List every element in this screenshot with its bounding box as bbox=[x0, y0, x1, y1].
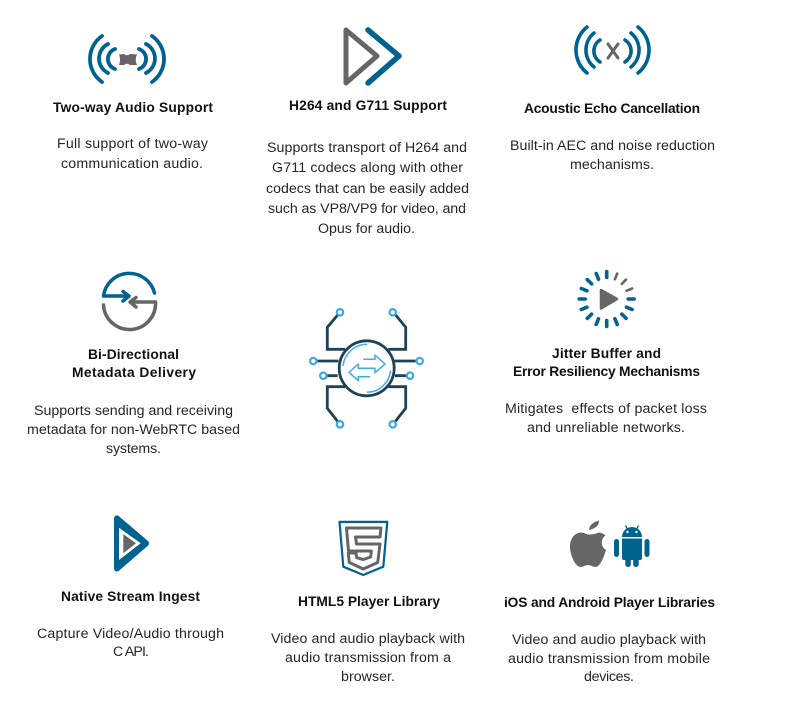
text: jitter buffer: and unreliable networks. bbox=[527, 420, 685, 436]
text: H264 and G711: G711 codecs along with other bbox=[272, 160, 463, 176]
panel: HTML5 player library bbox=[271, 522, 465, 685]
panel: iOS and Android libraries bbox=[504, 520, 715, 685]
heading: iOS and Android libraries: iOS and Android Player Libraries bbox=[504, 595, 715, 610]
text: iOS and Android libraries: audio transmission from mobile bbox=[508, 651, 710, 667]
heading: native stream ingest: Native Stream Ingest bbox=[61, 589, 200, 604]
heading: H264 and G711: H264 and G711 Support bbox=[289, 98, 447, 113]
text: jitter buffer bbox=[505, 401, 707, 436]
text: native stream ingest bbox=[37, 626, 224, 660]
icon: echo waves with x bbox=[576, 27, 649, 73]
icon: two-way audio waves bbox=[90, 36, 164, 82]
icon: double play chevrons bbox=[346, 30, 399, 83]
heading: jitter buffer: Jitter Buffer and bbox=[552, 346, 661, 361]
text: acoustic echo cancellation: Built-in AEC and noise reduction bbox=[510, 138, 715, 154]
text: iOS and Android libraries bbox=[508, 632, 710, 685]
panel: bi-directional metadata bbox=[27, 273, 240, 457]
text: acoustic echo cancellation: mechanisms. bbox=[570, 157, 654, 173]
icon: apple logo bbox=[570, 520, 606, 567]
heading: acoustic echo cancellation: Acoustic Echo Cancellation bbox=[524, 101, 700, 116]
heading: HTML5 player library: HTML5 Player Library bbox=[298, 594, 440, 609]
text: H264 and G711: Opus for audio. bbox=[318, 221, 415, 237]
text: bi-directional metadata: systems. bbox=[106, 441, 161, 457]
text: HTML5 player library bbox=[271, 631, 465, 685]
text: jitter buffer: Mitigates effects of packet loss bbox=[505, 401, 707, 417]
icon: HTML5 shield bbox=[340, 522, 387, 575]
text: acoustic echo cancellation bbox=[510, 138, 715, 173]
icon: bi-directional arrows in circle bbox=[104, 273, 156, 330]
heading: bi-directional metadata bbox=[72, 347, 196, 380]
central hub icon bbox=[310, 309, 423, 427]
text: iOS and Android libraries: devices. bbox=[584, 669, 634, 685]
panel: native stream ingest bbox=[37, 518, 224, 660]
text: H264 and G711: Supports transport of H264 and bbox=[267, 140, 467, 156]
text: bi-directional metadata bbox=[27, 403, 240, 457]
heading: bi-directional metadata: Metadata Delivery bbox=[72, 365, 196, 380]
icon: loading ring with play button bbox=[579, 272, 634, 326]
icon: android robot bbox=[614, 526, 650, 567]
panel: two-way audio bbox=[53, 36, 213, 172]
text: native stream ingest: Capture Video/Audio through bbox=[37, 626, 224, 642]
heading: jitter buffer: Error Resiliency Mechanisms bbox=[513, 364, 700, 379]
text: two-way audio: communication audio. bbox=[61, 156, 203, 172]
text: H264 and G711: codecs that can be easily added bbox=[266, 181, 469, 197]
text: H264 and G711 bbox=[266, 140, 469, 237]
text: two-way audio: Full support of two-way bbox=[57, 136, 209, 152]
text: bi-directional metadata: Supports sending and receiving bbox=[34, 403, 233, 419]
heading: jitter buffer bbox=[513, 346, 700, 379]
text: iOS and Android libraries: Video and audio playback with bbox=[512, 632, 706, 648]
icon: play triangle bbox=[117, 518, 146, 568]
heading: two-way audio: Two-way Audio Support bbox=[53, 100, 213, 115]
text: H264 and G711: such as VP8/VP9 for video, and bbox=[268, 201, 466, 217]
text: bi-directional metadata: metadata for non-WebRTC based bbox=[27, 422, 240, 438]
panel: jitter buffer bbox=[505, 272, 707, 436]
text: HTML5 player library: browser. bbox=[341, 669, 395, 685]
text: HTML5 player library: Video and audio playback with bbox=[271, 631, 465, 647]
text: HTML5 player library: audio transmission from a bbox=[285, 650, 451, 666]
panel: H264 and G711 bbox=[266, 30, 469, 237]
panel: acoustic echo cancellation bbox=[510, 27, 715, 173]
heading: bi-directional metadata: Bi-Directional bbox=[88, 347, 179, 362]
text: two-way audio bbox=[57, 136, 209, 172]
text: native stream ingest: C API. bbox=[113, 644, 149, 660]
